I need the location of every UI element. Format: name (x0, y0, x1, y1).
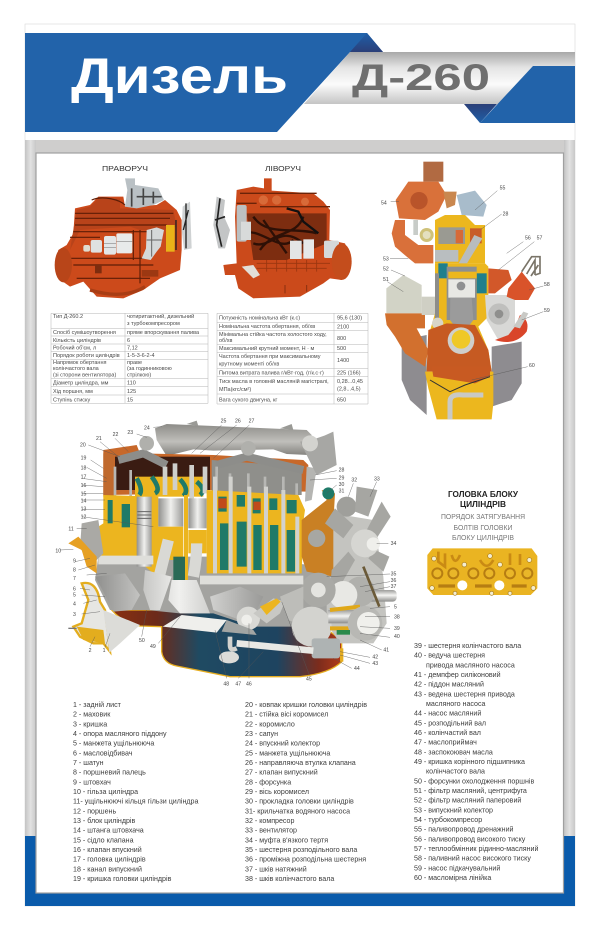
parts list: 1-19: 7 - шатун (73, 759, 104, 767)
parts list: 1-19: 12 - поршень (73, 807, 116, 815)
parts list: 20-38: 34 - муфта в'язкого тертя (245, 836, 328, 844)
callout leaders and numbers: 50 (139, 638, 145, 644)
table: engine specification right: Потужність номінальна кВт (к.с) (219, 316, 300, 322)
table: engine specification right: 95,6 (130) (337, 316, 362, 322)
engine illustration: left side (213, 178, 352, 298)
callout leaders and numbers: 38 (394, 615, 400, 621)
table: engine specification right: 500 (337, 346, 346, 352)
rear seal and cylinder liner part (68, 520, 103, 573)
parts list: 1-19: 4 - опора масляного піддону (73, 730, 167, 738)
callout labels: 51 (383, 277, 389, 283)
callout leaders and numbers: 2 (89, 648, 92, 654)
header banner (25, 33, 575, 132)
parts list: 20-38: 22 - коромисло (245, 720, 295, 728)
callout leaders and numbers: 29 (339, 476, 345, 482)
cutaway engine diagram with callouts 1-50 (55, 418, 400, 687)
parts list: 39-60: 42 - піддон масляний (414, 681, 484, 689)
parts list: 39-60: масляного насоса (426, 700, 486, 708)
cylinder head heading: БЛОКУ ЦИЛІНДРІВ (452, 533, 514, 542)
table: engine specification right: 2100 (337, 324, 349, 330)
callout leaders and numbers: 13 (81, 507, 87, 513)
callout leaders and numbers: 21 (96, 436, 102, 442)
parts list: 39-60: 41 - демпфер силіконовий (414, 671, 501, 679)
table: engine specification left (51, 313, 208, 404)
parts list: 39-60: 55 - паливопровод дренажний (414, 826, 514, 834)
parts list: 39-60: 59 - насос підкачувальний (414, 864, 500, 872)
callout labels: 55 (500, 185, 506, 191)
table: engine specification left: колінчастого вала (53, 366, 100, 372)
parts list: 20-38: 36 - проміжна розподільна шестерня (245, 856, 366, 864)
callout leaders and numbers: 28 (339, 468, 345, 474)
fan zone backing (327, 513, 387, 643)
parts list: 20-38 (245, 701, 367, 883)
parts list: 20-38: 38 - шків колінчастого вала (245, 875, 334, 883)
callout labels: 60 (529, 363, 535, 369)
heading: right side view: ПРАВОРУЧ (102, 164, 148, 173)
table: engine specification left: 7,12 (127, 346, 138, 352)
table: engine specification right: 225 (166) (337, 370, 361, 376)
callout leaders and numbers: 32 (351, 477, 357, 483)
table: engine specification right: крутному моменті об/хв (219, 362, 279, 368)
callout leaders and numbers: 45 (306, 677, 312, 683)
parts list: 39-60: 49 - кришка корінного підшипника (414, 758, 525, 766)
sieve and oil pickup (163, 615, 313, 663)
title: Дизель (71, 48, 288, 104)
callout leaders and numbers: 37 (391, 584, 397, 590)
callout leaders and numbers: 46 (246, 681, 252, 687)
flywheel and rear plate (68, 583, 140, 653)
table: engine specification right: Мінімальна стійка частота холостого ходу, (219, 331, 327, 338)
parts list: 1-19: 6 - масловідбивач (73, 749, 133, 757)
oil pan (112, 610, 342, 677)
table: engine specification right: 650 (337, 398, 346, 404)
table: engine specification left: Напрямок обертання (53, 360, 106, 366)
parts list: 20-38: 32 - компресор (245, 817, 295, 825)
callout leaders and numbers: 5 (394, 605, 397, 611)
callout leaders and numbers: 6 (73, 586, 76, 592)
cylinder head plate (427, 548, 537, 595)
callout leaders and numbers: 16 (81, 483, 87, 489)
callout leaders and numbers: 10 (55, 549, 61, 555)
callout leaders and numbers: 27 (249, 418, 255, 424)
table: engine specification right: Питома витрата палива г/кВт·год, (г/к.с·г) (219, 370, 324, 376)
table: engine specification right: Максимальний крутний момент, Н · м (219, 345, 315, 352)
pulleys (301, 567, 397, 609)
callout leaders and numbers: 31 (339, 488, 345, 494)
crankshaft (95, 560, 303, 630)
parts list: 20-38: 21 - стійка вісі коромисел (245, 711, 328, 719)
parts list: 39-60: 52 - фільтр масляний паперовий (414, 797, 521, 805)
callout leaders and numbers: 15 (81, 492, 87, 498)
engine illustration: right side (55, 178, 192, 298)
parts list: 39-60: 53 - випускний колектор (414, 806, 493, 814)
callout leaders and numbers: 19 (81, 456, 87, 462)
callout labels: 58 (544, 282, 550, 288)
callout leaders and numbers: 11 (68, 527, 74, 533)
parts list: 1-19: 3 - кришка (73, 720, 107, 728)
callout leaders and numbers: 48 (223, 681, 229, 687)
callout leaders and numbers: 7 (73, 576, 76, 582)
parts list: 1-19: 2 - маховик (73, 711, 111, 719)
table: engine specification right: Вага сухого двигуна, кг (219, 398, 277, 404)
parts list: 39-60: 50 - форсунки охолодження поршнів (414, 777, 534, 785)
callout leaders and numbers: 26 (235, 418, 241, 424)
table: engine specification left: Робочий об'єм, л (53, 344, 96, 352)
table: engine specification left: (зі сторони вентилятора) (53, 372, 116, 378)
table: engine specification left: Спосіб сумішоутворення (53, 330, 116, 336)
parts list: 20-38: 37 - шків натяжний (245, 865, 307, 873)
table: engine specification left: (за годинниковою (127, 366, 172, 372)
parts list: 20-38: 35 - шестерня розподільного вала (245, 846, 357, 854)
parts list: 20-38: 25 - манжета ущільнююча (245, 749, 330, 757)
callout leaders and numbers: 23 (127, 430, 133, 436)
parts list: 20-38: 28 - форсунка (245, 778, 291, 786)
table: engine specification left: 110 (127, 380, 136, 386)
callout leaders and numbers: 42 (372, 655, 378, 661)
parts list: 1-19: 11- ущільнюючі кільця гільзи циліндра (73, 798, 198, 806)
table: engine specification right: МПа(кгс/см²) (219, 387, 251, 393)
callout labels: 53 (383, 257, 389, 263)
parts list: 1-19: 16 - клапан впускний (73, 846, 142, 854)
callout leaders and numbers: 40 (394, 634, 400, 640)
table: engine specification right: Номінальна частота обертання, об/хв (219, 324, 315, 330)
table: engine specification left: праве (127, 360, 142, 366)
callout leaders and numbers: 1 (103, 648, 106, 654)
parts list: 39-60: 39 - шестерня колінчастого вала (414, 642, 521, 650)
parts list: 39-60: колінчастого вала (426, 768, 485, 776)
callout labels: 59 (544, 308, 550, 314)
parts list: 1-19: 5 - манжета ущільнююча (73, 740, 154, 748)
callout labels: 56 (525, 236, 531, 242)
table: engine specification right: 0,28...0,45 (337, 379, 363, 385)
callout leaders and numbers: 4 (73, 601, 76, 607)
parts list: 20-38: 20 - ковпак кришки головки циліндрів (245, 701, 367, 709)
parts list: 1-19: 9 - штовхач (73, 778, 111, 786)
callout leaders and numbers: 49 (150, 644, 156, 650)
callout labels: 28 (503, 211, 509, 217)
callout leaders and numbers: 24 (144, 425, 150, 431)
table: engine specification right: Частота обертання при максимальному (219, 354, 321, 360)
callout leaders and numbers: 14 (81, 498, 87, 504)
parts list: 20-38: 26 - направляюча втулка клапана (245, 759, 356, 767)
parts list: 39-60: 57 - теплообмінник рідинно-масляний (414, 845, 538, 853)
parts list: 20-38: 33 - вентилятор (245, 827, 297, 835)
callout leaders and numbers (55, 418, 400, 687)
table: engine specification right: 1400 (337, 358, 349, 364)
callout leaders and numbers: 33 (374, 477, 380, 483)
parts list: 1-19 (73, 701, 198, 883)
parts list: 39-60: 60 - масломірна лінійка (414, 874, 491, 882)
callout leaders and numbers: 43 (372, 661, 378, 667)
table: engine specification left: 6 (127, 338, 130, 344)
callout leaders and numbers: 35 (391, 571, 397, 577)
callout leaders and numbers: 20 (80, 443, 86, 449)
table: engine specification right (217, 313, 368, 404)
callout leaders and numbers: 22 (113, 432, 119, 438)
callout leaders and numbers: 25 (221, 418, 227, 424)
callout leaders and numbers: 5 (73, 593, 76, 599)
parts list: 20-38: 27 - клапан випускний (245, 769, 318, 777)
parts list: 39-60: 54 - турбокомпресор (414, 816, 482, 824)
parts list: 39-60: 46 - колінчастий вал (414, 729, 481, 737)
table: engine specification left: 15 (127, 398, 133, 404)
callout leaders and numbers: 3 (73, 612, 76, 618)
table: engine specification left: 125 (127, 389, 136, 395)
parts list: 20-38: 30 - прокладка головки циліндрів (245, 798, 354, 806)
parts list: 39-60: 40 - ведуча шестерня (414, 652, 485, 660)
parts list: 1-19: 8 - поршневий палець (73, 769, 146, 777)
cylinder head heading: ЦИЛІНДРІВ (460, 500, 506, 509)
internals backing (95, 557, 333, 627)
parts list: 20-38: 24 - впускний колектор (245, 740, 320, 748)
table: engine specification left: Тип Д-260.2 (53, 314, 83, 320)
callout leaders and numbers: 41 (383, 647, 389, 653)
parts list: 20-38: 29 - вісь коромисел (245, 788, 309, 796)
callout leaders and numbers: 36 (391, 578, 397, 584)
callout labels: 54 (381, 201, 387, 207)
parts list: 1-19: 10 - гільза циліндра (73, 788, 138, 796)
callout leaders and numbers: 44 (354, 666, 360, 672)
callout leaders and numbers: 30 (339, 482, 345, 488)
table: engine specification left: чотиритактний, дизельний (127, 313, 194, 320)
parts list: 39-60: 51 - фільтр масляний, центрифуга (414, 787, 527, 795)
callout leaders and numbers: 8 (73, 567, 76, 573)
table: engine specification right: об/хв (219, 338, 232, 344)
table: engine specification left: з турбокомпресором (127, 321, 180, 327)
parts list: 1-19: 19 - кришка головки циліндрів (73, 875, 172, 883)
cylinder head heading: БОЛТІВ ГОЛОВКИ (454, 523, 512, 532)
engine cross-section with callouts 51-60 (381, 162, 550, 419)
table: engine specification left: Діаметр циліндра, мм (53, 380, 109, 386)
heading: left side view: ЛІВОРУЧ (265, 164, 301, 173)
table: engine specification left: пряме впорскування палива (127, 330, 200, 336)
parts list: 39-60: 56 - паливопровод високого тиску (414, 835, 526, 843)
cylinder head heading (441, 490, 525, 542)
parts list: 1-19: 18 - канал випускний (73, 865, 142, 873)
fan (325, 487, 391, 590)
callout leaders and numbers: 18 (81, 465, 87, 471)
parts list: 1-19: 17 - головка циліндрів (73, 856, 146, 864)
callout labels (381, 185, 550, 380)
parts list: 39-60: 43 - ведена шестерня привода (414, 690, 515, 698)
intake manifold (155, 424, 312, 456)
oil pump and gears (292, 606, 382, 662)
callout leaders and numbers: 34 (391, 541, 397, 547)
callout labels: 57 (537, 236, 543, 242)
table: engine specification right: (2,8...4,5) (337, 386, 361, 392)
parts list: 39-60: привода масляного насоса (426, 661, 515, 669)
callout labels: 52 (383, 267, 389, 273)
table: engine specification left: Ступінь стиску (53, 398, 90, 404)
cylinder head heading: ГОЛОВКА БЛОКУ (448, 490, 519, 499)
table: engine specification left: Порядок роботи циліндрів (53, 353, 120, 359)
parts list: 20-38: 31- крильчатка водяного насоса (245, 807, 350, 815)
parts list: 39-60: 44 - насос масляний (414, 710, 481, 718)
callout leaders and numbers: 9 (73, 559, 76, 565)
parts list: 39-60: 48 - заспокоювач масла (414, 748, 493, 756)
callout leaders and numbers: 17 (81, 474, 87, 480)
valve cover and head background (103, 445, 308, 495)
parts list: 39-60: 47 - маслоприймач (414, 739, 477, 747)
parts list: 39-60: 58 - паливний насос високого тиску (414, 855, 531, 863)
table: engine specification right: 800 (337, 336, 346, 342)
parts list: 1-19: 13 - блок циліндрів (73, 817, 135, 825)
table: engine specification left: 1-5-3-6-2-4 (127, 353, 155, 359)
callout leaders and numbers: 12 (81, 514, 87, 520)
parts list: 1-19: 14 - штанга штовхача (73, 827, 144, 835)
parts list: 1-19: 15 - сідло клапана (73, 836, 134, 844)
table: engine specification right: Тиск масла в головній масляній магістралі, (219, 378, 329, 385)
table: engine specification left: Кількість циліндрів (53, 338, 101, 344)
model name: Д-260 (352, 57, 490, 98)
callout leaders and numbers: 47 (235, 681, 241, 687)
parts list: 39-60 (414, 642, 538, 882)
callout leaders and numbers: 39 (394, 626, 400, 632)
table: engine specification left: Хід поршня, мм (53, 389, 93, 395)
parts list: 39-60: 45 - розподільний вал (414, 719, 486, 727)
parts list: 20-38: 23 - сапун (245, 730, 278, 738)
cylinder head heading: ПОРЯДОК ЗАТЯГУВАННЯ (441, 512, 525, 521)
parts list: 1-19: 1 - задній лист (73, 701, 122, 709)
table: engine specification left: стрілкою) (127, 372, 151, 378)
